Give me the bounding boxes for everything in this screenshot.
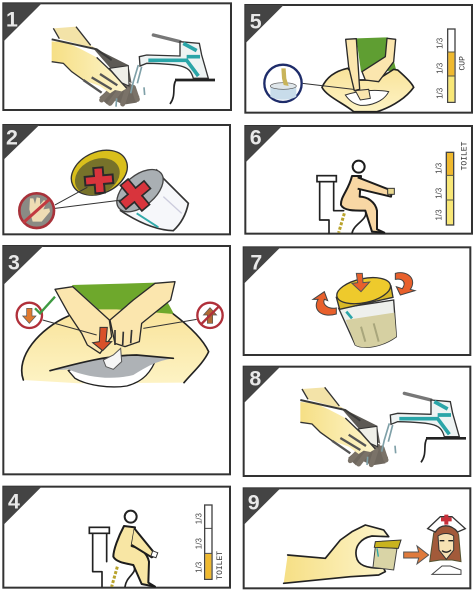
icon: arrow to nurse (404, 546, 429, 564)
chart: fill gauge toilet: 1/3 (194, 561, 203, 573)
icon: toilet bowl (68, 356, 157, 387)
panel: step 2 do not touch inside lid or cup (3, 125, 230, 234)
icon: urine stream (112, 567, 117, 587)
panel: step 8 wash hands again (244, 366, 470, 476)
panel: step 4 first urine in toilet (3, 487, 230, 588)
chart: fill gauge cup: 1/3 (435, 62, 444, 74)
icon: urine cup (334, 273, 396, 347)
icon: seated person (341, 161, 394, 233)
icon: detail circle (264, 65, 354, 102)
chart: fill gauge toilet: 1/3 (194, 538, 203, 549)
chart: fill gauge cup: CUP (459, 56, 468, 71)
icon: faucet (367, 393, 466, 465)
icon: press arrow (352, 273, 370, 292)
icon: thighs (22, 309, 209, 383)
icon: hand holding cup (284, 525, 389, 583)
chart: fill gauge toilet: TOILET (460, 141, 469, 170)
chart: fill gauge toilet: 1/3 (435, 209, 444, 221)
icon: wrong direction sign (143, 303, 223, 328)
icon: seated person (113, 511, 158, 587)
icon: urine stream (339, 213, 344, 233)
icon: left rotation arrow (313, 292, 336, 315)
icon: faucet (116, 35, 215, 107)
step number 1: 1 (6, 7, 18, 31)
icon: red cross on lid (84, 166, 114, 194)
icon: shirt (356, 37, 396, 72)
icon: hands with soap (52, 27, 139, 105)
chart: fill gauge toilet (194, 505, 225, 580)
panel: step 5 midstream into cup (245, 5, 472, 113)
chart: fill gauge cup: 1/3 (435, 37, 444, 49)
step number 7: 7 (250, 250, 262, 274)
icon: correct direction sign (17, 297, 97, 335)
icon: nurse (428, 515, 465, 574)
icon: tissue (103, 348, 122, 369)
icon: small urine cup (373, 540, 401, 570)
step number 4: 4 (8, 490, 20, 514)
panel: step 6 last urine in toilet (245, 126, 472, 234)
panel: step 3 wipe front to back (3, 246, 230, 474)
icon: right rotation arrow (395, 273, 415, 295)
icon: shirt (72, 283, 175, 316)
chart: fill gauge toilet: 1/3 (435, 162, 444, 174)
panel: step 1 wash hands (3, 3, 231, 110)
step number 5: 5 (250, 10, 262, 34)
icon: no touching sign (19, 187, 122, 228)
icon: toilet (317, 176, 366, 233)
icon: cup (109, 161, 188, 231)
icon: hands with soap (300, 387, 388, 465)
chart: fill gauge toilet (435, 141, 469, 225)
icon: red wiping arrow (93, 327, 112, 351)
step number 9: 9 (248, 490, 260, 514)
chart: fill gauge toilet: 1/3 (194, 513, 203, 524)
icon: hands (55, 282, 175, 353)
icon: thighs and bowl (322, 68, 414, 112)
chart: fill gauge toilet: 1/3 (435, 187, 444, 199)
chart: fill gauge cup (435, 29, 468, 102)
chart: fill gauge toilet: TOILET (216, 551, 225, 580)
panel: step 7 close cup (244, 247, 470, 355)
icon: arms and cup (346, 38, 396, 100)
step number 3: 3 (8, 250, 20, 274)
step number 6: 6 (250, 126, 262, 150)
panel: step 9 hand cup to nurse (244, 488, 470, 588)
icon: toilet (89, 527, 135, 587)
icon: red cross on cup (112, 172, 158, 218)
chart: fill gauge cup: 1/3 (435, 87, 444, 99)
step number 8: 8 (249, 366, 261, 390)
step number 2: 2 (6, 126, 18, 150)
icon: cup lid (64, 142, 135, 204)
